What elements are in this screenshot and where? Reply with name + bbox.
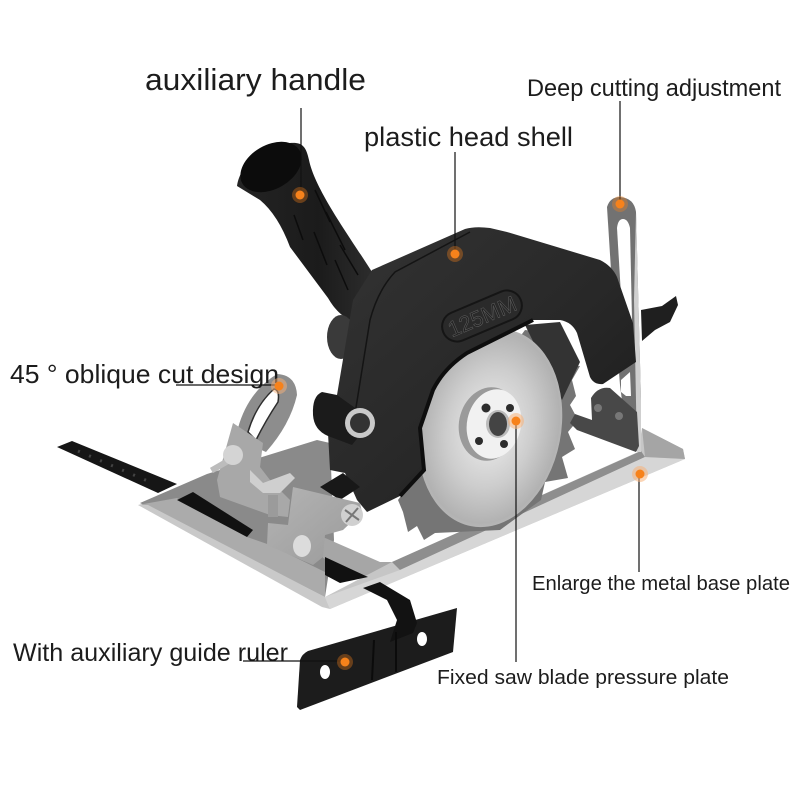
wing nut [250, 470, 295, 493]
label: fixed saw blade pressure plate [437, 413, 729, 689]
guide slots [177, 492, 253, 537]
label: plastic head shell: plastic head shell [364, 122, 573, 152]
shell seam [354, 232, 470, 420]
label: auxiliary handle: auxiliary handle [145, 62, 366, 97]
strap slot [617, 219, 632, 320]
bracket plate [217, 423, 290, 517]
knob with washer [313, 392, 375, 445]
label: fixed saw blade pressure plate: Fixed saw blade pressure plate [437, 667, 729, 689]
label: with auxiliary guide ruler: With auxiliary guide ruler [13, 639, 288, 667]
plastic head shell [328, 227, 636, 512]
guide ruler [57, 441, 177, 493]
front lip [138, 505, 330, 609]
handle opening [231, 131, 311, 203]
label: plastic head shell [364, 122, 573, 262]
mount plate [570, 388, 639, 452]
black lever [320, 473, 360, 500]
label: auxiliary handle [145, 62, 366, 203]
lower bracket [267, 487, 362, 565]
front rail [325, 428, 685, 609]
label: enlarge the metal base plate [532, 466, 790, 595]
label: 45 degree oblique cut design: 45 ° oblique cut design [10, 359, 279, 389]
inner crossbar [323, 537, 395, 580]
base plate [138, 428, 685, 609]
plate holes [320, 665, 330, 679]
blade guard shadow [525, 322, 580, 400]
45 degree arc bracket [210, 374, 363, 565]
ruler ticks [78, 451, 150, 482]
blade disc [401, 316, 579, 540]
auxiliary handle [231, 131, 372, 320]
rail highlight [325, 457, 685, 609]
rail groove [392, 451, 645, 570]
125MM badge: 125MM [444, 291, 520, 342]
arbor flange [452, 382, 528, 466]
handle grip marks [294, 190, 358, 290]
back plate surface [140, 440, 334, 597]
plate hook [363, 582, 417, 642]
rear mount disc [327, 315, 355, 359]
nut and stud [210, 457, 232, 473]
toothed blade [398, 330, 580, 540]
label: enlarge the metal base plate: Enlarge the metal base plate [532, 573, 790, 595]
label: deep cutting adjustment: Deep cutting adjustment [527, 75, 781, 102]
front plate surface [138, 498, 325, 597]
rivet [293, 535, 311, 557]
guide plate [297, 582, 457, 710]
depth adjustment strap [607, 197, 641, 452]
label: deep cutting adjustment [527, 75, 781, 212]
depth clamp stub [641, 296, 678, 341]
cross screw [341, 504, 363, 526]
